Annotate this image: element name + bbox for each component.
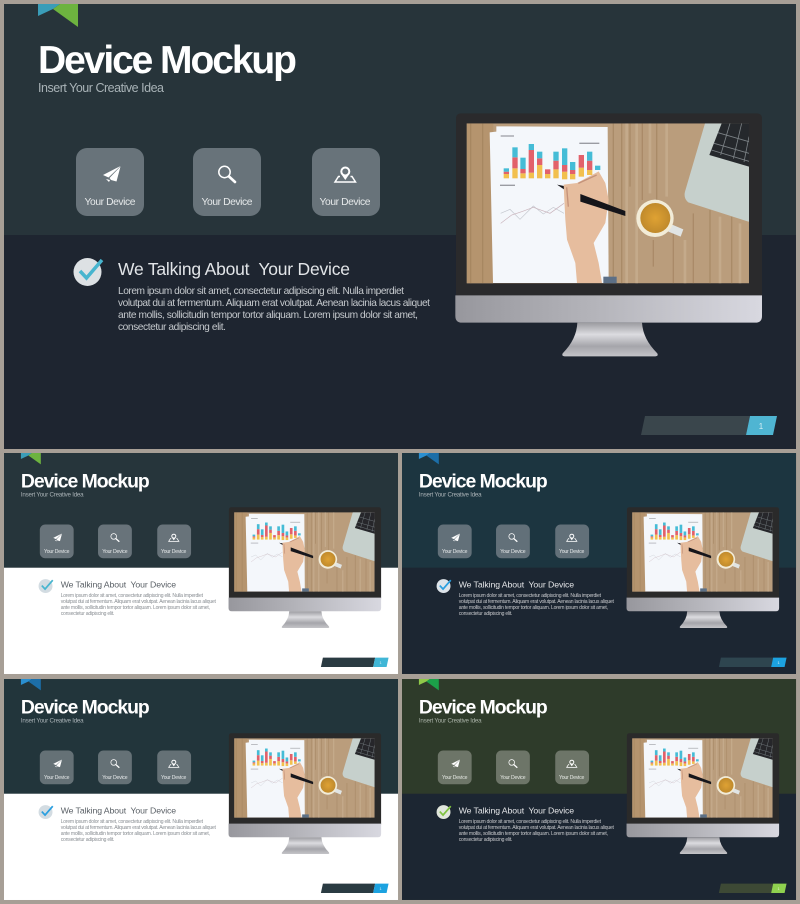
monitor mockup [229,507,381,628]
device tile 3: Your Device [161,549,186,555]
body text: ante mollis, sollicitudin tempor tortor aliquam. Lorem ipsum dolor sit amet, [459,605,608,611]
body text: consectetur adipiscing elit. [61,837,114,843]
ribbon icon [419,453,439,464]
body text: ante mollis, sollicitudin tempor tortor aliquam. Lorem ipsum dolor sit amet, [118,310,418,321]
device tile 2 [98,751,132,784]
body text: ante mollis, sollicitudin tempor tortor aliquam. Lorem ipsum dolor sit amet, [61,831,210,837]
body text: consectetur adipiscing elit. [459,837,512,843]
body text: consectetur adipiscing elit. [61,611,114,617]
panel: blue light slide [4,679,398,900]
panel: main slide [4,4,796,449]
check icon [437,579,451,593]
page number bar [321,884,389,893]
body text: volutpat dui at fermentum. Aliquam erat volutpat. Aenean lacinia lacus aliquet [61,599,217,605]
monitor mockup [627,733,779,854]
body text: Lorem ipsum dolor sit amet, consectetur adipiscing elit. Nulla imperdiet [118,286,404,297]
ribbon icon [21,679,41,690]
device tile 2 [496,525,530,558]
page number bar [719,658,787,667]
page number bar [321,658,389,667]
device tile 1: Your Device [44,775,70,781]
body text [118,286,430,333]
body text [61,819,217,843]
body text [459,593,615,617]
device tile 2: Your Device [202,197,253,208]
device tile 2: Your Device [500,549,526,555]
check icon [74,258,102,286]
check icon [437,805,451,819]
device tile 2 [193,148,261,216]
title: Device Mockup [419,470,548,492]
title: Device Mockup [419,696,548,718]
subtitle: Insert Your Creative Idea [21,492,84,499]
page number bar: 1 [379,886,382,891]
title: Device Mockup [38,39,297,82]
device tile 3 [157,525,191,558]
body text: Lorem ipsum dolor sit amet, consectetur adipiscing elit. Nulla imperdiet [459,593,602,599]
ribbon icon [38,4,78,27]
body text: Lorem ipsum dolor sit amet, consectetur adipiscing elit. Nulla imperdiet [459,819,602,825]
page number bar: 1 [759,422,764,431]
device tile 2 [496,751,530,784]
body text: ante mollis, sollicitudin tempor tortor aliquam. Lorem ipsum dolor sit amet, [459,831,608,837]
monitor mockup [455,113,762,356]
panel: green dark slide [402,679,796,900]
body text: volutpat dui at fermentum. Aliquam erat volutpat. Aenean lacinia lacus aliquet [459,599,615,605]
subtitle: Insert Your Creative Idea [419,718,482,725]
device tile 1 [438,525,472,558]
device tile 3: Your Device [559,549,584,555]
device tile 1: Your Device [84,197,136,208]
title: Device Mockup [21,696,150,718]
device tile 3 [555,751,589,784]
body text: volutpat dui at fermentum. Aliquam erat volutpat. Aenean lacinia lacus aliquet [61,825,217,831]
subtitle: Insert Your Creative Idea [419,492,482,499]
body text: Lorem ipsum dolor sit amet, consectetur adipiscing elit. Nulla imperdiet [61,593,204,599]
device tile 1 [76,148,144,216]
device tile 2: Your Device [102,775,128,781]
check icon [39,579,53,593]
device tile 2: Your Device [102,549,128,555]
body text [459,819,615,843]
body text: consectetur adipiscing elit. [459,611,512,617]
device tile 3: Your Device [559,775,584,781]
device tile 1 [438,751,472,784]
device tile 2 [98,525,132,558]
subtitle: Insert Your Creative Idea [21,718,84,725]
ribbon icon [21,453,41,464]
page number bar [719,884,787,893]
heading: We Talking About Your Device [459,806,574,816]
body text: volutpat dui at fermentum. Aliquam erat volutpat. Aenean lacinia lacus aliquet [118,298,430,309]
heading: We Talking About Your Device [118,259,350,279]
heading: We Talking About Your Device [459,580,574,590]
body text: consectetur adipiscing elit. [118,322,226,333]
page number bar: 1 [379,660,382,665]
device tile 1 [40,525,74,558]
page number bar: 1 [777,886,780,891]
device tile 3: Your Device [320,197,371,208]
device tile 1 [40,751,74,784]
panel: blue dark slide [402,453,796,674]
monitor mockup [229,733,381,854]
panel: white light slide [4,453,398,674]
device tile 3: Your Device [161,775,186,781]
body text [61,593,217,617]
title: Device Mockup [21,470,150,492]
body text: ante mollis, sollicitudin tempor tortor aliquam. Lorem ipsum dolor sit amet, [61,605,210,611]
page number bar: 1 [777,660,780,665]
subtitle: Insert Your Creative Idea [38,81,164,95]
body text: volutpat dui at fermentum. Aliquam erat volutpat. Aenean lacinia lacus aliquet [459,825,615,831]
device tile 1: Your Device [442,549,468,555]
device tile 1: Your Device [442,775,468,781]
ribbon icon [419,679,439,690]
device tile 1: Your Device [44,549,70,555]
device tile 3 [157,751,191,784]
heading: We Talking About Your Device [61,580,176,590]
body text: Lorem ipsum dolor sit amet, consectetur adipiscing elit. Nulla imperdiet [61,819,204,825]
monitor mockup [627,507,779,628]
page number bar [641,416,777,435]
heading: We Talking About Your Device [61,806,176,816]
device tile 2: Your Device [500,775,526,781]
check icon [39,805,53,819]
device tile 3 [555,525,589,558]
device tile 3 [312,148,380,216]
